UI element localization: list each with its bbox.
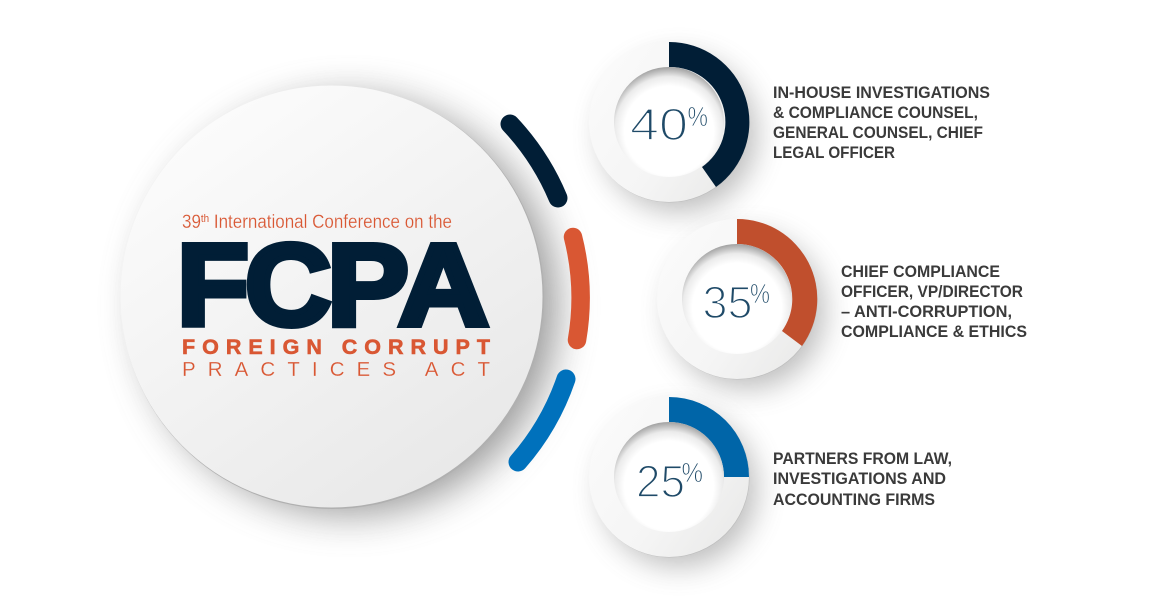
donut: 35% bbox=[657, 219, 825, 389]
arc: navy bbox=[510, 124, 558, 198]
FCPA wordmark bbox=[177, 220, 489, 350]
donut: 25% bbox=[589, 397, 757, 567]
donut: 35%: % bbox=[750, 278, 770, 309]
practices act: PRACTICES ACT bbox=[182, 358, 490, 381]
label: 35% bbox=[841, 263, 1027, 341]
conference line: International Conference on the bbox=[209, 212, 452, 233]
label: 35%: COMPLIANCE & ETHICS bbox=[841, 323, 1027, 341]
FCPA wordmark: P bbox=[327, 220, 409, 350]
arc: orange bbox=[573, 237, 581, 340]
label: 25% bbox=[773, 450, 952, 509]
FCPA wordmark: F bbox=[177, 220, 249, 350]
label: 40% bbox=[773, 84, 990, 162]
donut: 35%: 35 bbox=[702, 277, 752, 328]
foreign corrupt: FOREIGN CORRUPT bbox=[182, 335, 490, 359]
label: 25%: PARTNERS FROM LAW, bbox=[773, 450, 952, 468]
panel: main circle bbox=[120, 86, 557, 514]
label: 40%: & COMPLIANCE COUNSEL, bbox=[773, 104, 978, 122]
FCPA wordmark: A bbox=[398, 220, 489, 350]
donut: 40%: 40 bbox=[630, 99, 688, 150]
label: 35%: – ANTI-CORRUPTION, bbox=[841, 303, 1012, 321]
donut: 40%: % bbox=[688, 101, 708, 132]
label: 35%: OFFICER, VP/DIRECTOR bbox=[841, 283, 1023, 301]
label: 40%: GENERAL COUNSEL, CHIEF bbox=[773, 124, 983, 142]
arc: blue bbox=[518, 379, 566, 462]
label: 25%: ACCOUNTING FIRMS bbox=[773, 491, 935, 509]
label: 25%: INVESTIGATIONS AND bbox=[773, 470, 946, 488]
donut: 25%: 25 bbox=[636, 456, 685, 507]
FCPA wordmark: C bbox=[245, 220, 332, 350]
label: 35%: CHIEF COMPLIANCE bbox=[841, 263, 1000, 281]
donut: 25%: % bbox=[682, 457, 703, 488]
donut: 40% bbox=[589, 42, 757, 212]
conference line: th bbox=[201, 213, 209, 225]
conference line: 39 bbox=[182, 212, 203, 233]
label: 40%: IN-HOUSE INVESTIGATIONS bbox=[773, 84, 990, 102]
label: 40%: LEGAL OFFICER bbox=[773, 144, 895, 162]
